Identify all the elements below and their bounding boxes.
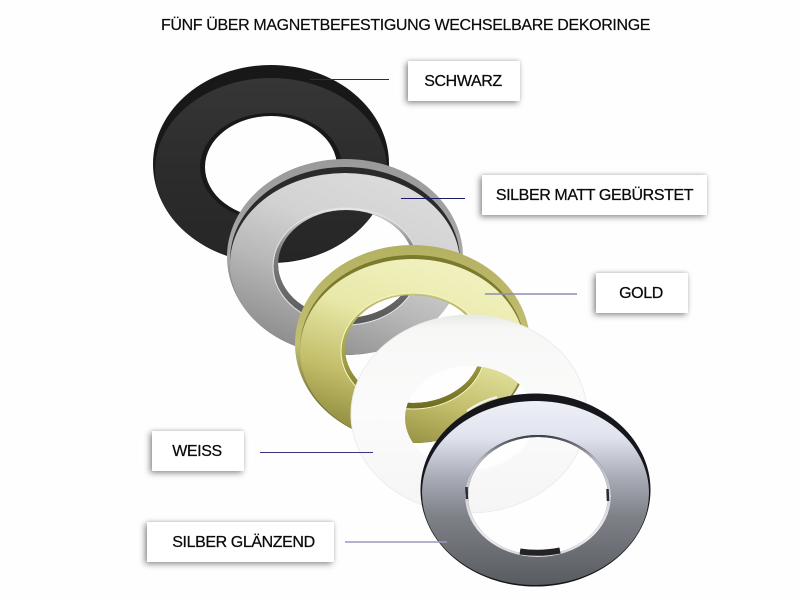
ring: schwarz	[153, 65, 389, 263]
label: gold: GOLD	[619, 285, 663, 302]
label: silber glänzend: SILBER GLÄNZEND	[172, 534, 315, 551]
label: weiss	[152, 431, 244, 471]
ring: silber glänzend	[420, 393, 651, 587]
label: weiss: WEISS	[172, 443, 222, 460]
ring: weiss	[351, 315, 587, 513]
line: silber matt gebürstet	[401, 198, 465, 200]
line: weiss	[260, 452, 373, 454]
ring: gold	[295, 245, 530, 443]
label: silber glänzend	[147, 522, 334, 562]
line: gold	[485, 293, 577, 295]
line: silber glänzend	[345, 541, 447, 543]
line: schwarz	[310, 78, 389, 80]
label: silber matt gebürstet	[482, 175, 707, 215]
ring: silber matt gebürstet	[227, 159, 463, 355]
label: schwarz: SCHWARZ	[424, 73, 502, 90]
title: FÜNF ÜBER MAGNETBEFESTIGUNG WECHSELBARE DEKORINGE	[161, 17, 650, 34]
label: gold	[596, 273, 688, 313]
label: schwarz	[408, 61, 520, 101]
label: silber matt gebürstet: SILBER MATT GEBÜRSTET	[496, 187, 693, 204]
